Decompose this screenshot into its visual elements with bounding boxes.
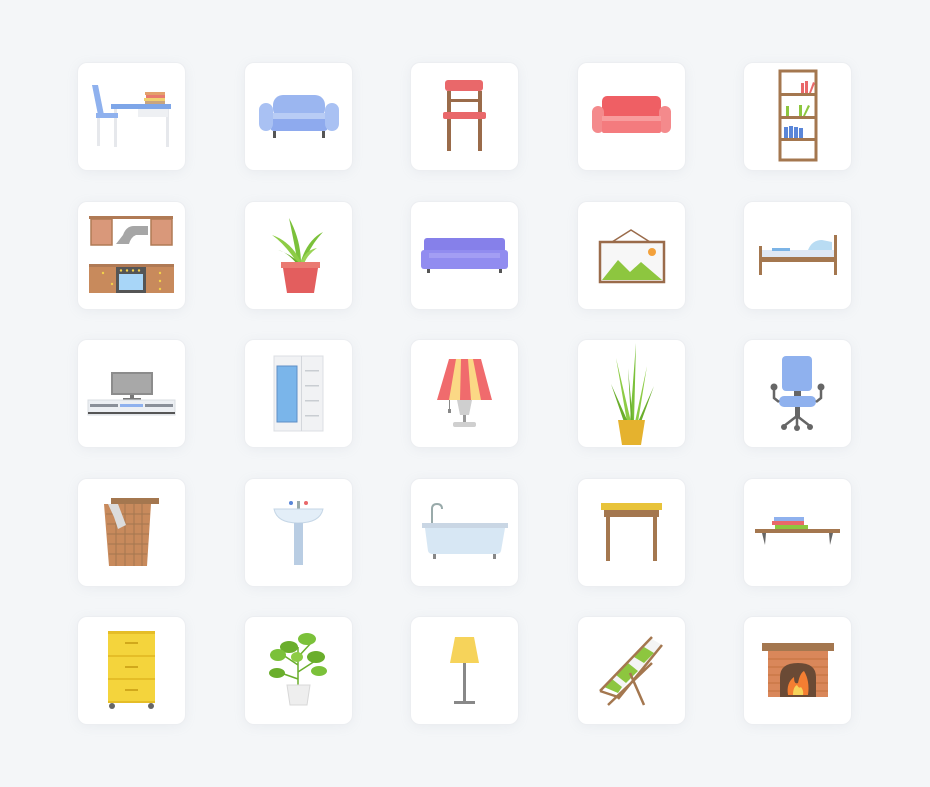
card: office chair bbox=[744, 340, 851, 447]
card: desk and chair bbox=[78, 63, 185, 170]
card: tall plant bbox=[578, 340, 685, 447]
card: bookshelf bbox=[744, 63, 851, 170]
card: fireplace bbox=[744, 617, 851, 724]
card: plant white pot bbox=[245, 617, 352, 724]
card: blue armchair bbox=[245, 63, 352, 170]
card: purple sofa bbox=[411, 202, 518, 309]
card: laundry basket bbox=[78, 479, 185, 586]
card: bathtub bbox=[411, 479, 518, 586]
card: kitchen bbox=[78, 202, 185, 309]
card: wooden chair bbox=[411, 63, 518, 170]
card: picture frame bbox=[578, 202, 685, 309]
card: bed bbox=[744, 202, 851, 309]
card: fridge/wardrobe bbox=[245, 340, 352, 447]
card: table lamp bbox=[411, 340, 518, 447]
card: deck chair bbox=[578, 617, 685, 724]
card: plant red pot bbox=[245, 202, 352, 309]
card: yellow drawers bbox=[78, 617, 185, 724]
card: floor lamp bbox=[411, 617, 518, 724]
card: stool bbox=[578, 479, 685, 586]
card: wall shelf with books bbox=[744, 479, 851, 586]
card: tv stand bbox=[78, 340, 185, 447]
card: red sofa bbox=[578, 63, 685, 170]
card: sink bbox=[245, 479, 352, 586]
